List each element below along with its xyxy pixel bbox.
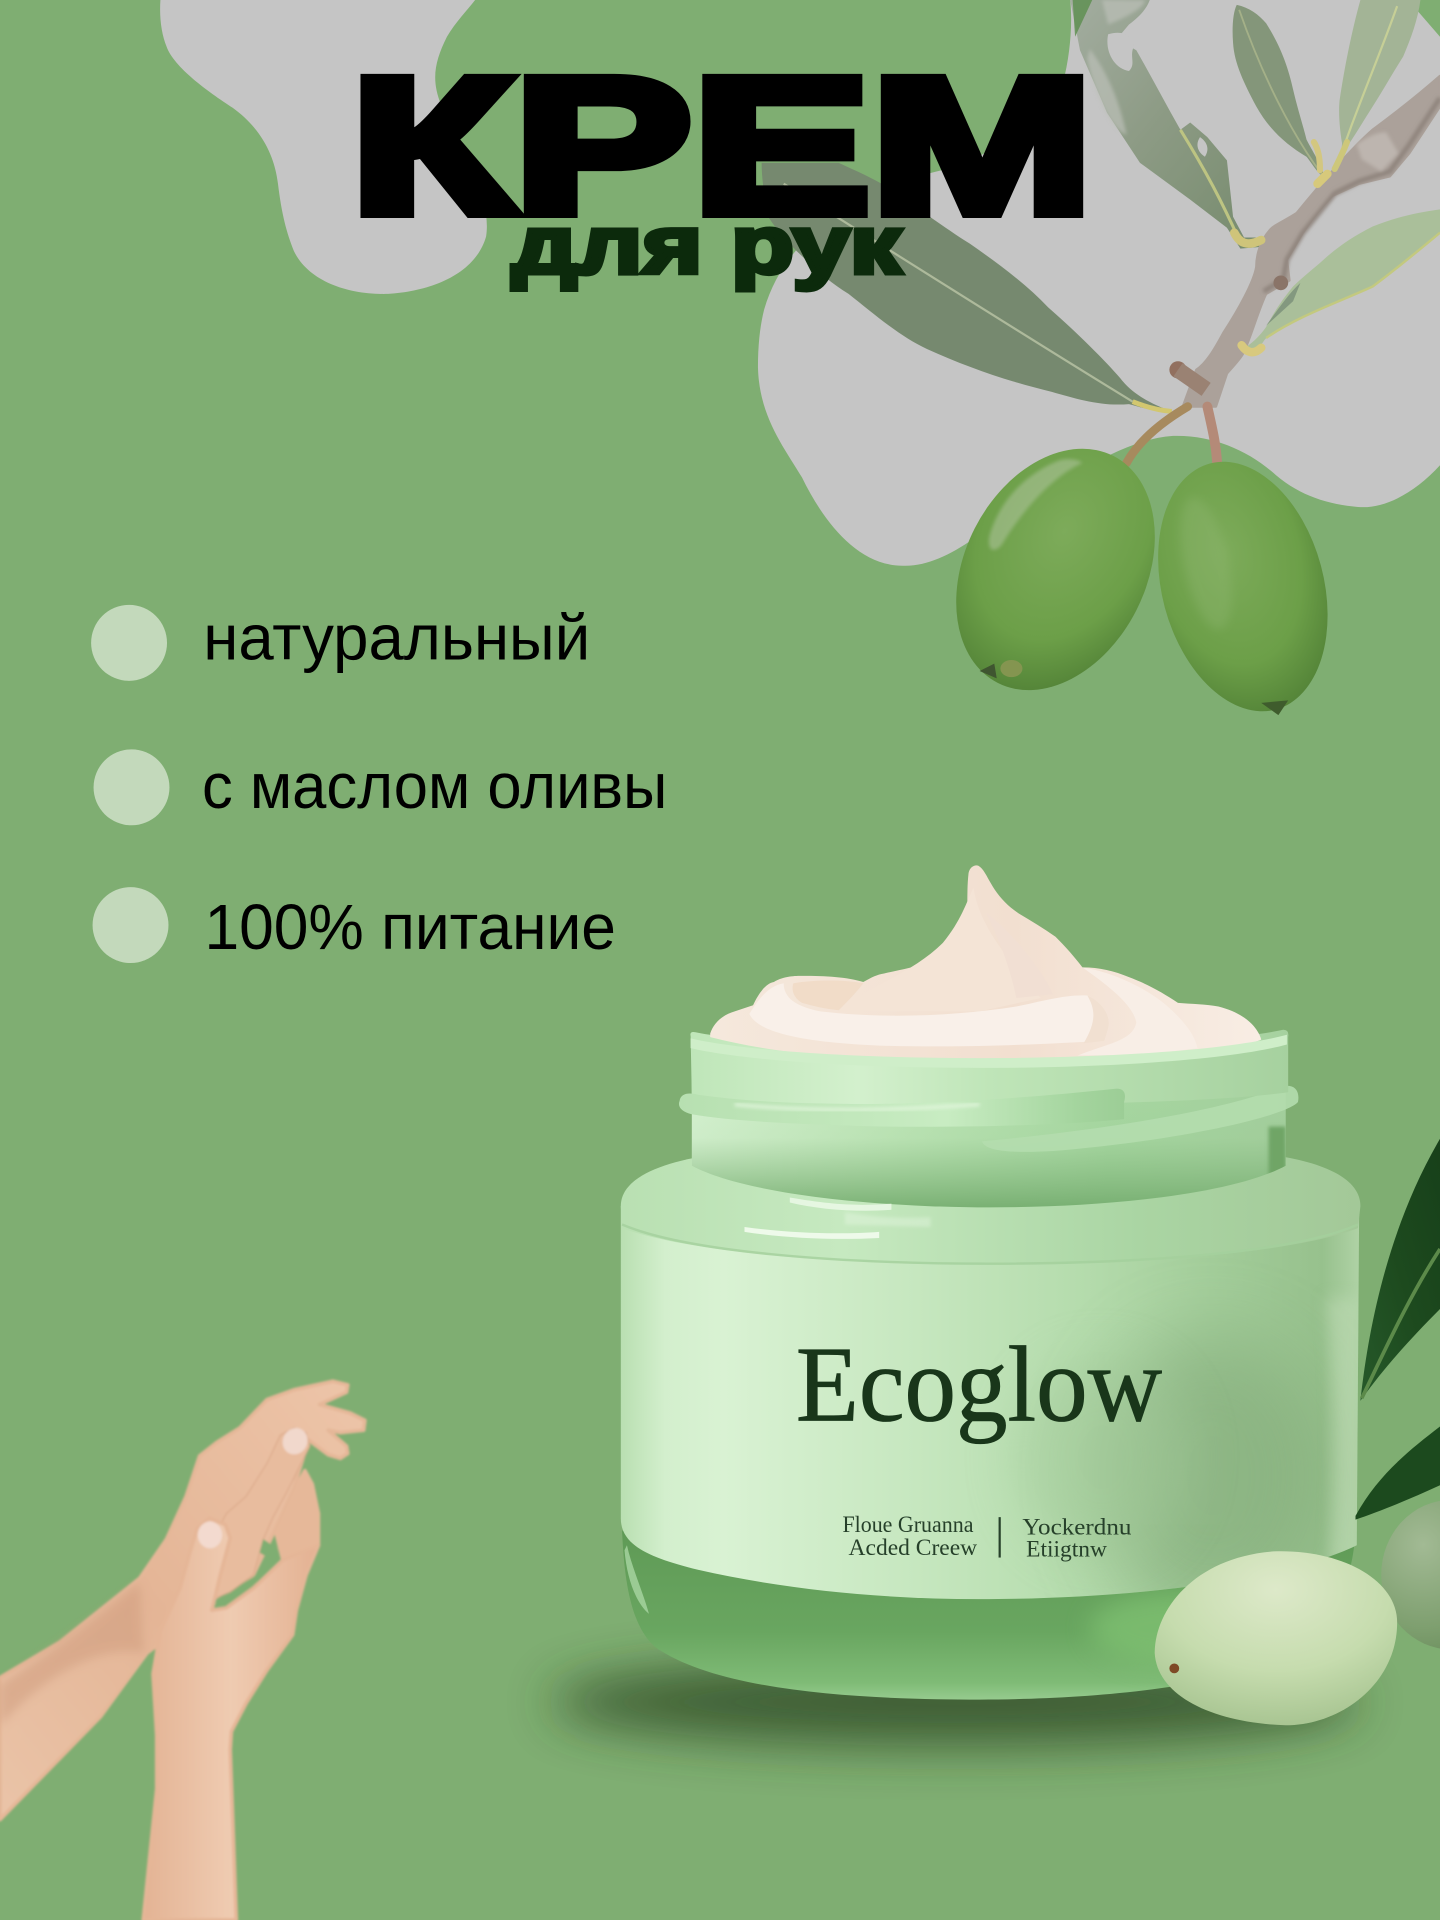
branch <box>1169 76 1440 407</box>
cream hollow <box>793 981 863 1010</box>
olive: right <box>1132 443 1354 730</box>
label small text right: Yockerdnu <box>1022 1514 1132 1540</box>
jar rim <box>690 1030 1288 1105</box>
leaf: right <box>1247 209 1440 355</box>
thread ring <box>679 1089 1125 1127</box>
cream right roll <box>1078 967 1198 1056</box>
jar shoulder <box>621 1153 1360 1265</box>
label divider <box>999 1517 1001 1558</box>
cream <box>710 865 1261 1060</box>
nail: thumb <box>198 1521 222 1548</box>
olive: right side grey-green <box>1381 1500 1440 1649</box>
knobs <box>1273 276 1288 290</box>
decorative grey blob: top right <box>758 0 1440 566</box>
bullet 3 <box>93 887 168 963</box>
rim front lip <box>691 1035 1287 1068</box>
jar neck <box>692 1087 1286 1208</box>
olive branch illustration <box>762 0 1440 730</box>
leaf: top middle <box>1233 5 1325 178</box>
second thread right <box>982 1086 1298 1152</box>
olive: pale front <box>1155 1551 1397 1725</box>
dark leaf upper midrib <box>1362 1249 1440 1398</box>
shoulder highlights <box>744 1198 931 1239</box>
petioles <box>1314 142 1320 170</box>
dark leaves right <box>1356 1139 1440 1520</box>
index finger crossing <box>212 1428 310 1599</box>
cream front roll <box>749 983 1109 1046</box>
green gap between fingers <box>260 1539 278 1560</box>
nail: index finger <box>278 1424 312 1459</box>
bullet 1 <box>91 605 167 681</box>
title: КРЕМ <box>350 37 1093 253</box>
hands <box>0 1381 365 1920</box>
decorative grey blob: top left <box>160 0 487 294</box>
olive hole <box>1169 1663 1179 1673</box>
feature text 2: с маслом оливы <box>202 751 667 822</box>
feature list <box>91 602 667 963</box>
label small text left: Floue Gruanna <box>842 1512 973 1538</box>
bullet 2 <box>94 749 169 825</box>
subtitle: для рук <box>512 200 902 291</box>
jar shadow <box>551 1658 1359 1746</box>
feature text 3: 100% питание <box>204 892 616 963</box>
cream jar <box>551 865 1360 1746</box>
label small text right <box>1022 1514 1132 1562</box>
feature text 1: натуральный <box>203 602 590 673</box>
lip line <box>622 1224 1358 1264</box>
left arm and hand <box>0 1381 365 1820</box>
leaf: top left <box>1070 0 1270 249</box>
fingers of right hand behind <box>273 1471 318 1575</box>
olive: left <box>917 415 1194 724</box>
label small text left <box>842 1512 977 1561</box>
jar base <box>622 1531 1356 1700</box>
olive stem: left <box>1127 407 1188 463</box>
leaf: large centre <box>762 163 1172 411</box>
cream peak shade <box>838 888 1041 1011</box>
olive stem: right <box>1207 407 1217 463</box>
ring highlight <box>735 1104 980 1110</box>
right palm, thumb and arm <box>143 1518 318 1920</box>
label small text left: Acded Creew <box>849 1535 977 1561</box>
brand name: Ecoglow <box>796 1325 1162 1444</box>
green sliver between hands <box>214 1577 256 1605</box>
jar body label <box>621 1206 1359 1616</box>
left arm shade <box>0 1583 144 1727</box>
leaf: top right <box>1333 0 1420 174</box>
leaf blotches <box>1107 33 1207 157</box>
dark leaf upper <box>1360 1139 1440 1401</box>
label small text right: Etiigtnw <box>1026 1536 1107 1562</box>
dark leaf lower <box>1356 1427 1440 1520</box>
